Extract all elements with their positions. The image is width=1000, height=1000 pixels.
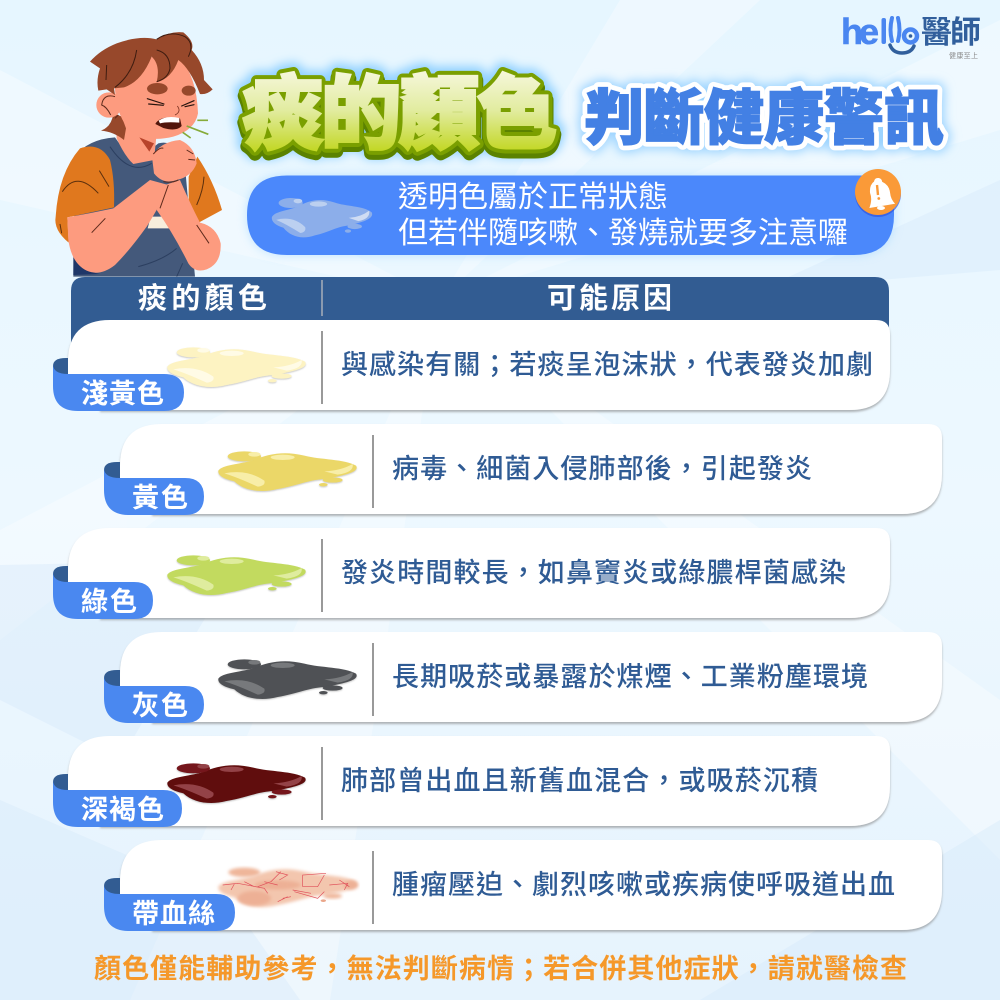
row: 黃色: 黃色 xyxy=(132,483,188,513)
row: 黃色 xyxy=(104,424,942,515)
mouth xyxy=(155,117,182,129)
row: 綠色 xyxy=(53,528,890,619)
row: 綠色: 綠色 xyxy=(81,587,137,617)
table header xyxy=(71,277,889,345)
row: 帶血絲 xyxy=(104,840,942,931)
puddle: light yellow xyxy=(167,347,306,387)
logo: hello醫師: 健康至上 xyxy=(949,51,978,60)
shirt stripe xyxy=(148,217,170,228)
row: 淺黃色: 與感染有關；若痰呈泡沫狀，代表發炎加劇 xyxy=(341,350,873,380)
row: 深褐色: 深褐色 xyxy=(81,795,164,825)
logo: hello醫師: he xyxy=(841,11,879,52)
puddle: gray xyxy=(218,659,357,699)
head xyxy=(115,56,198,139)
right arm xyxy=(157,180,221,270)
icon: alert bell xyxy=(855,169,901,217)
puddle: yellow xyxy=(218,451,357,491)
sideburn xyxy=(101,113,126,140)
logo: hello醫師: 醫師 xyxy=(921,15,981,50)
right sleeve xyxy=(189,157,222,223)
title: 判斷健康警訊: 判斷健康警訊 xyxy=(584,85,944,152)
table header: 痰的顏色 xyxy=(138,282,267,315)
row: 綠色: 發炎時間較長，如鼻竇炎或綠膿桿菌感染 xyxy=(341,558,846,588)
brows xyxy=(147,83,168,94)
row: 淺黃色 xyxy=(53,320,890,411)
row: 深褐色: 肺部曾出血且新舊血混合，或吸菸沉積 xyxy=(341,766,818,796)
puddle: dark brown xyxy=(167,763,306,803)
title: 痰的顏色: 痰的顏色 xyxy=(243,74,557,163)
row: 深褐色 xyxy=(53,736,890,827)
logo: hello醫師 xyxy=(841,11,981,60)
cough lines xyxy=(183,120,208,138)
footer note: 顏色僅能輔助參考，無法判斷病情；若合併其他症狀，請就醫檢查 xyxy=(94,953,907,984)
title: 判斷健康警訊: 判斷健康警訊 xyxy=(584,85,944,152)
row: 黃色: 病毒、細菌入侵肺部後，引起發炎 xyxy=(392,454,812,484)
table header: 可能原因 xyxy=(547,282,672,315)
row: 淺黃色: 淺黃色 xyxy=(81,379,164,409)
row: 帶血絲: 腫瘤壓迫、劇烈咳嗽或疾病使呼吸道出血 xyxy=(392,870,895,900)
banner text: 透明色屬於正常狀態 xyxy=(398,181,668,214)
fists xyxy=(152,140,197,181)
row: 灰色: 長期吸菸或暴露於煤煙、工業粉塵環境 xyxy=(392,662,868,692)
title: 痰的顏色: 痰的顏色 xyxy=(243,70,557,159)
left sleeve xyxy=(55,147,114,243)
puddle: green xyxy=(167,555,306,595)
hair xyxy=(90,32,213,95)
neck xyxy=(115,113,157,164)
row: 帶血絲: 帶血絲 xyxy=(132,899,215,929)
title: 判斷健康警訊: 判斷健康警訊 xyxy=(584,85,944,152)
row: 灰色 xyxy=(104,632,942,723)
banner text xyxy=(398,181,848,250)
puddle: blood streaked xyxy=(218,868,358,907)
banner text: 但若伴隨咳嗽、發燒就要多注意囉 xyxy=(398,217,848,250)
callout banner xyxy=(247,169,901,255)
row: 灰色: 灰色 xyxy=(132,691,188,721)
left arm xyxy=(67,180,168,273)
title: 痰的顏色: 痰的顏色 xyxy=(243,70,557,159)
title: 痰的顏色: 痰的顏色 xyxy=(243,70,557,159)
illustration: coughing boy xyxy=(55,32,222,277)
icon: clear puddle xyxy=(272,198,372,237)
eyes xyxy=(147,99,194,107)
